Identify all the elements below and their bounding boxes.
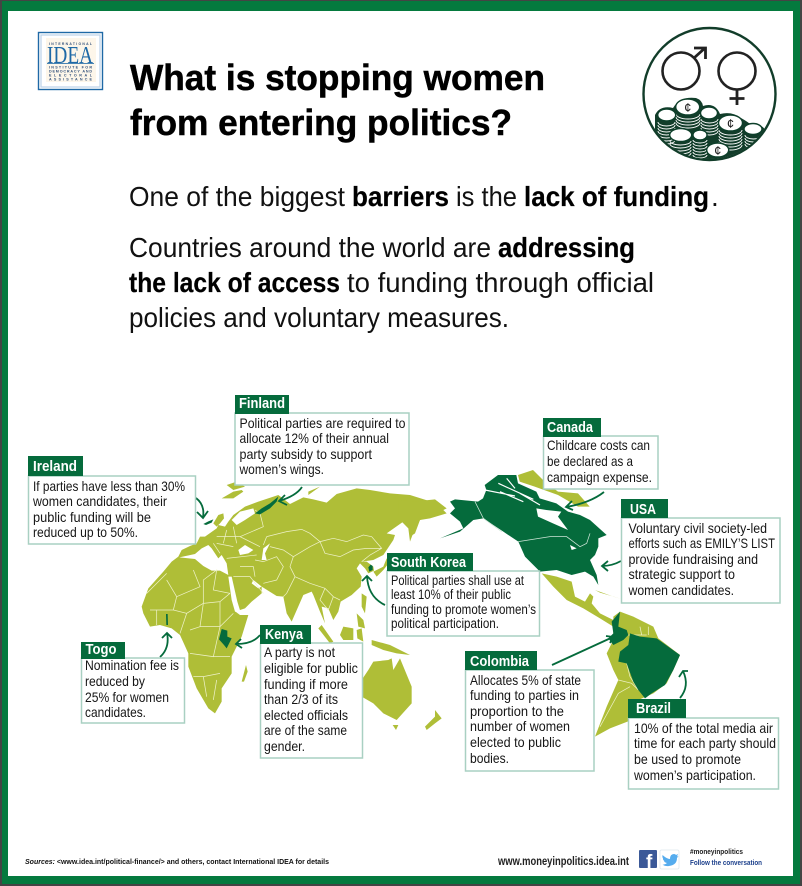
panel: Finland xyxy=(235,395,409,485)
panel: Kenya xyxy=(260,625,362,758)
panel: Ireland: If parties have less than 30% xyxy=(33,478,185,494)
panel: USA: strategic support to xyxy=(628,566,735,582)
panel: USA xyxy=(621,499,780,603)
panel: Kenya: are of the same xyxy=(264,722,347,738)
panel: Kenya: eligible for public xyxy=(264,660,358,676)
panel: Ireland: reduced up to 50%. xyxy=(33,524,138,540)
text block: addressing access: Countries around the world are xyxy=(129,232,491,263)
arrows xyxy=(160,487,688,698)
logo: International IDEA: DEMOCRACY AND xyxy=(49,70,92,74)
panel: Togo: Nomination fee is xyxy=(85,657,179,673)
icon: Facebook: f xyxy=(646,852,653,873)
map: highlighted Togo xyxy=(166,614,168,625)
title: from entering politics? xyxy=(130,102,512,143)
panel: Canada: Canada xyxy=(547,420,594,436)
arrow: Brazil xyxy=(679,671,688,698)
panel: Brazil xyxy=(628,699,778,789)
panel: Canada: campaign expense. xyxy=(547,469,652,485)
panel: Finland: Political parties are required to xyxy=(240,415,406,431)
text block: lack of funding: is the xyxy=(456,181,517,212)
map: Greenland and Central America xyxy=(398,470,680,737)
panel: Brazil: be used to promote xyxy=(634,751,741,767)
panel: Kenya: A party is not xyxy=(264,644,335,660)
panel: Colombia: Allocates 5% of state xyxy=(470,672,581,688)
panel: Kenya: elected officials xyxy=(264,707,348,723)
text block: lack of funding: barriers xyxy=(352,181,449,212)
hashtag and follow note xyxy=(690,847,762,867)
icon: gender symbols and coins: ¢ xyxy=(727,116,734,131)
map: water bodies xyxy=(179,508,270,613)
text block: addressing access: policies and voluntary measures. xyxy=(129,302,509,333)
icon: Facebook xyxy=(639,850,657,873)
panel: South Korea: least 10% of their public xyxy=(391,587,511,602)
panel: Togo: candidates. xyxy=(85,704,146,720)
text block: addressing access: the lack of access xyxy=(129,267,340,298)
panel: Kenya: than 2/3 of its xyxy=(264,691,338,707)
panel: Colombia: elected to public xyxy=(470,734,561,750)
icon: gender symbols and coins: ¢ xyxy=(684,100,691,115)
hashtag and follow note: #moneyinpolitics xyxy=(690,847,743,856)
panel: Togo: Togo xyxy=(86,642,117,658)
panel: Ireland xyxy=(28,456,196,544)
panel: South Korea: Political parties shall use at xyxy=(391,573,524,588)
panel: Brazil: women’s participation. xyxy=(633,767,756,783)
map: islands xyxy=(213,482,442,730)
arrow: South Korea xyxy=(362,576,385,605)
panel: Colombia: bodies. xyxy=(470,750,509,766)
map: highlighted Colombia xyxy=(608,612,628,645)
map: highlighted South Korea xyxy=(368,565,373,572)
panel: Canada: Childcare costs can xyxy=(547,437,650,453)
hashtag and follow note: Follow the conversation xyxy=(690,858,762,867)
panel: Finland: party subsidy to support xyxy=(240,446,372,462)
panel: Togo xyxy=(81,642,184,723)
arrow: Kenya xyxy=(236,635,260,648)
panel: Colombia xyxy=(465,651,594,771)
text block: lack of funding: lack of funding xyxy=(524,181,709,212)
map: Africa and Eurasia xyxy=(142,482,447,730)
logo: International IDEA xyxy=(38,32,102,90)
logo: International IDEA: ASSISTANCE xyxy=(49,78,93,82)
logo: International IDEA: ELECTORAL xyxy=(49,74,93,78)
map: borders xyxy=(147,510,382,700)
text block: addressing access: to funding through official xyxy=(347,267,654,298)
icon: Twitter xyxy=(660,850,679,869)
panel: USA: Voluntary civil society-led xyxy=(628,520,767,536)
panel: South Korea: funding to promote women’s xyxy=(391,602,536,617)
panel: Kenya: gender. xyxy=(264,738,305,754)
icon: gender symbols and coins xyxy=(644,28,776,165)
panel: Colombia: proportion to the xyxy=(470,703,564,719)
arrow: Ireland xyxy=(196,498,208,518)
text block: lack of funding: . xyxy=(711,181,719,212)
panel: Ireland: Ireland xyxy=(33,459,77,475)
map: highlighted Kenya xyxy=(219,629,232,648)
panel: South Korea xyxy=(387,553,540,636)
panel: Finland: women’s wings. xyxy=(239,461,324,477)
panel: Brazil: 10% of the total media air xyxy=(634,720,773,736)
title xyxy=(130,57,545,143)
panel: Finland: Finland xyxy=(239,396,285,412)
panel: Colombia: number of women xyxy=(470,718,570,734)
text block: lack of funding: One of the biggest xyxy=(129,181,345,212)
panel: Kenya: funding if more xyxy=(264,676,348,692)
panel: Togo: 25% for women xyxy=(85,689,169,705)
panel: Colombia: Colombia xyxy=(470,654,530,670)
panel: Ireland: women candidates, their xyxy=(32,493,167,509)
world map xyxy=(142,470,680,737)
panel: Ireland: public funding will be xyxy=(33,509,151,525)
panel: Togo: reduced by xyxy=(85,673,145,689)
map: highlighted USA and Canada xyxy=(440,475,607,585)
logo: International IDEA: INSTITUTE FOR xyxy=(49,66,92,70)
panel: Kenya: Kenya xyxy=(265,627,304,643)
arrow: Togo xyxy=(160,633,172,657)
arrow: USA xyxy=(602,561,621,571)
panel: Brazil: time for each party should xyxy=(634,735,776,751)
panel: USA: provide fundraising and xyxy=(628,551,758,567)
map: highlighted Finland xyxy=(255,497,278,514)
logo: International IDEA: IDEA xyxy=(47,43,94,69)
panel: Canada xyxy=(543,418,658,489)
title: What is stopping women xyxy=(130,57,545,98)
panel: Finland: allocate 12% of their annual xyxy=(240,430,389,446)
logo: International IDEA: INTERNATIONAL xyxy=(49,42,92,46)
panel: Colombia: funding to parties in xyxy=(470,687,579,703)
text block: lack of funding xyxy=(129,181,719,212)
arrow: Finland xyxy=(279,487,302,505)
sources note: Sources: <www.idea.int/political-finance/> and others, contact International IDEA for details xyxy=(25,857,329,866)
map: highlighted Ireland xyxy=(203,519,213,525)
panel: USA: USA xyxy=(630,502,656,518)
text block: addressing access: addressing xyxy=(498,232,635,263)
panel: South Korea: South Korea xyxy=(391,555,467,571)
panel: Brazil: Brazil xyxy=(636,701,671,717)
panel: South Korea: political participation. xyxy=(391,616,499,631)
text block: addressing access xyxy=(129,232,654,333)
website: www.moneyinpolitics.idea.int xyxy=(497,854,629,868)
arrow: Canada xyxy=(566,492,604,510)
panel: USA: women candidates. xyxy=(628,582,734,598)
panel: Canada: be declared as a xyxy=(547,453,633,469)
map: highlighted Brazil xyxy=(618,633,680,698)
arrow: Colombia xyxy=(552,636,613,665)
icon: gender symbols and coins: ¢ xyxy=(714,143,721,158)
